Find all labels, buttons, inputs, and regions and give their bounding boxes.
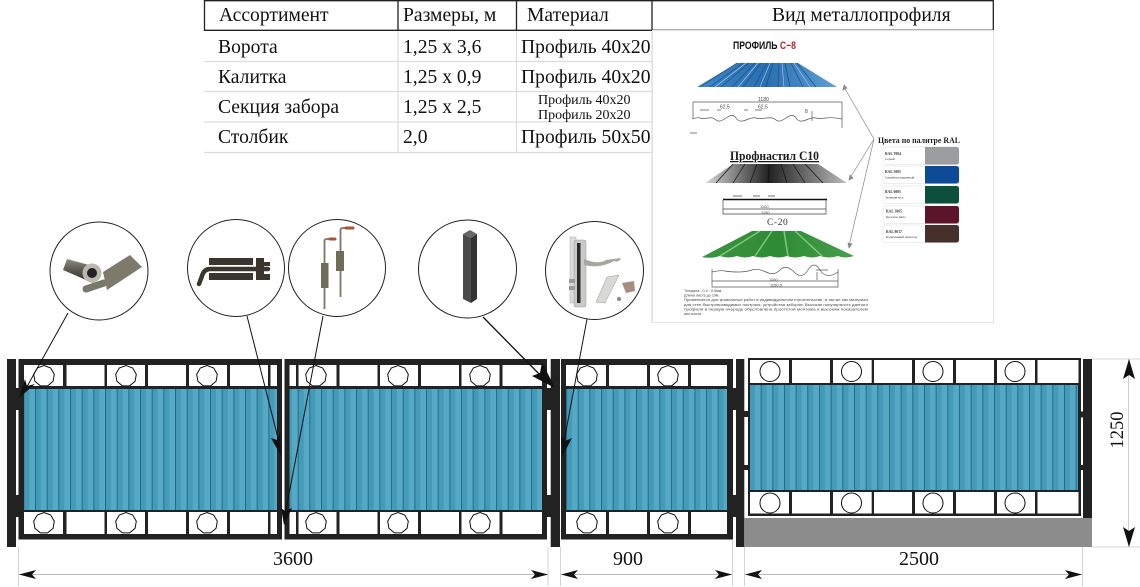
section ring ornaments (760, 362, 1025, 513)
RAL swatch: brown: Коричневый шоколад (886, 235, 917, 239)
gate leaf 2 (284, 359, 547, 540)
table row: Ворота: Ворота (218, 37, 278, 58)
gate 2 ornaments (306, 366, 490, 533)
table row: Ворота: Профиль 40х20 (521, 37, 651, 58)
callout: post (418, 220, 516, 318)
blue sheet C-8 (697, 63, 837, 87)
table row: Секция забора: Секция забора (218, 97, 339, 118)
C-20 drawing: 1150,5 (770, 282, 783, 288)
profile C10 title: Профнастил С10 (730, 148, 819, 163)
fence section (748, 358, 1081, 516)
wicket profile sheet (566, 389, 727, 510)
specification text: жесткости. (684, 312, 702, 316)
fence drawing (7, 358, 1092, 547)
icon: door lock (569, 237, 635, 307)
C-20 drawing: 1100 (769, 277, 778, 282)
table grid lines (204, 0, 993, 322)
dimension 1250: 1250 (1108, 412, 1128, 448)
header row: Вид металлопрофиля (772, 5, 951, 26)
table row: Калитка (218, 67, 651, 88)
RAL swatch: blue (883, 166, 959, 184)
specification text: для стен быстровозводимых построек, устройства заборов. Высокая популярность данного (684, 303, 868, 307)
arrow: hinge (19, 313, 68, 398)
C10 drawing: 1150 (761, 210, 770, 215)
gate 1 cells (24, 365, 277, 534)
arrows from callouts to fence (19, 313, 587, 525)
callout: door lock (546, 222, 644, 320)
specification text (684, 289, 869, 316)
C10 drawing: 1100 (760, 204, 769, 209)
profile C-8 title: ПРОФИЛЬ С−8 (733, 40, 796, 52)
RAL swatch: wine red: Красное вино (886, 215, 906, 219)
table row: Секция забора (218, 93, 631, 123)
dimension 1250 (1108, 359, 1135, 547)
C-20 label: С-20 (767, 218, 788, 228)
RAL swatch: grey: RAL 7004 (885, 152, 901, 156)
dimension 3600: 3600 (273, 548, 313, 570)
icon: square post (463, 230, 477, 303)
RAL swatch: green: RAL 6005 (885, 190, 901, 194)
RAL swatch: grey (883, 147, 959, 164)
callout: vertical bolts (288, 220, 386, 316)
gate 1 ornaments (34, 366, 217, 533)
section cells (750, 360, 1078, 514)
gate 2 profile sheet (290, 389, 542, 510)
concrete base (744, 518, 1092, 547)
icon: hinge (63, 255, 142, 290)
header row: Размеры, м (403, 5, 496, 26)
C10 drawing (723, 196, 827, 215)
arrow: lock (561, 319, 587, 457)
wicket ornaments (577, 366, 678, 533)
callout: latch (188, 220, 284, 316)
table row: Столбик: 2,0 (403, 127, 428, 148)
RAL palette title: Цвета по палитре RAL (878, 136, 960, 145)
panel border (652, 30, 994, 322)
header row: Материал (527, 5, 609, 26)
arrow: latch (247, 316, 281, 456)
table row: Ворота: 1,25 х 3,6 (403, 37, 482, 58)
table row: Секция забора: Профиль 20х20 (538, 108, 631, 123)
dimension 3600 (19, 548, 548, 579)
post 3 (733, 359, 749, 547)
post 1 (7, 359, 19, 547)
RAL swatch: green: Зеленый мох (885, 196, 904, 200)
specification text: профиля в первую очередь обусловлена простотой монтажа и высоким показателем (684, 308, 869, 312)
table row: Калитка: 1,25 х 0,9 (403, 67, 481, 88)
C-8 drawing: 62,5 (758, 104, 768, 110)
table row: Столбик: Профиль 50х50 (521, 127, 651, 148)
arrow: vertical bolts (281, 316, 323, 525)
pointer lines to sheets (843, 85, 874, 248)
panel: metal profile types (652, 30, 994, 322)
table row: Секция забора: Профиль 40х20 (538, 93, 631, 108)
dimension 900 (561, 548, 732, 579)
arrow: post (483, 317, 555, 388)
RAL swatch: green (883, 186, 959, 204)
RAL swatch: blue: RAL 5005 (885, 170, 901, 174)
C-20 drawing (712, 265, 838, 288)
header row: Ассортимент (219, 5, 329, 26)
wicket (561, 359, 733, 540)
specification text: Толщина - 0,4 - 0,9мм. (684, 289, 722, 293)
C-8 drawing: 8 (805, 109, 808, 115)
C-8 drawing: 62,5 (720, 104, 730, 110)
post 2 (547, 359, 560, 547)
C-8 drawing (690, 97, 842, 133)
dimension 2500: 2500 (899, 548, 939, 570)
dimensions (18, 359, 1140, 586)
RAL swatch: brown (883, 225, 959, 242)
table row: Секция забора: 1,25 х 2,5 (403, 97, 482, 118)
gate 1 profile sheet (24, 389, 277, 510)
green sheet C-20 (702, 231, 854, 258)
RAL swatch: grey: Серый (885, 157, 895, 161)
RAL swatch: brown: RAL 8017 (886, 230, 902, 234)
dimension extension lines (18, 359, 1140, 586)
dimension 2500 (745, 548, 1082, 579)
callout: hinge (50, 222, 148, 320)
RAL swatch: wine red: RAL 3005 (886, 210, 902, 214)
dark sheet C10 (705, 164, 847, 183)
post 4 (1080, 359, 1092, 518)
icon: vertical bolts (321, 228, 353, 309)
table row: Ворота (218, 37, 651, 58)
specification text: Применяется для кровельных работ в индивидуальном строительстве, а так же как материал (684, 298, 868, 302)
RAL swatch: blue: Синий насыщенный (885, 176, 914, 180)
gate leaf 1 (18, 359, 282, 540)
RAL swatch: wine red (883, 206, 959, 224)
table row: Калитка: Профиль 40х20 (521, 67, 651, 88)
section profile sheet (750, 385, 1078, 490)
wicket cells (566, 365, 727, 534)
specification text: Длина листа до 10м. (684, 294, 720, 298)
table row: Калитка: Калитка (218, 67, 287, 88)
table row: Столбик (218, 127, 651, 148)
table: assortment (204, 0, 993, 322)
header row (219, 5, 951, 26)
C-8 drawing: 1180 (758, 97, 769, 103)
dimension 900: 900 (613, 548, 643, 570)
table row: Столбик: Столбик (218, 127, 289, 148)
icon: latch (199, 258, 270, 284)
gate 2 cells (290, 365, 542, 534)
